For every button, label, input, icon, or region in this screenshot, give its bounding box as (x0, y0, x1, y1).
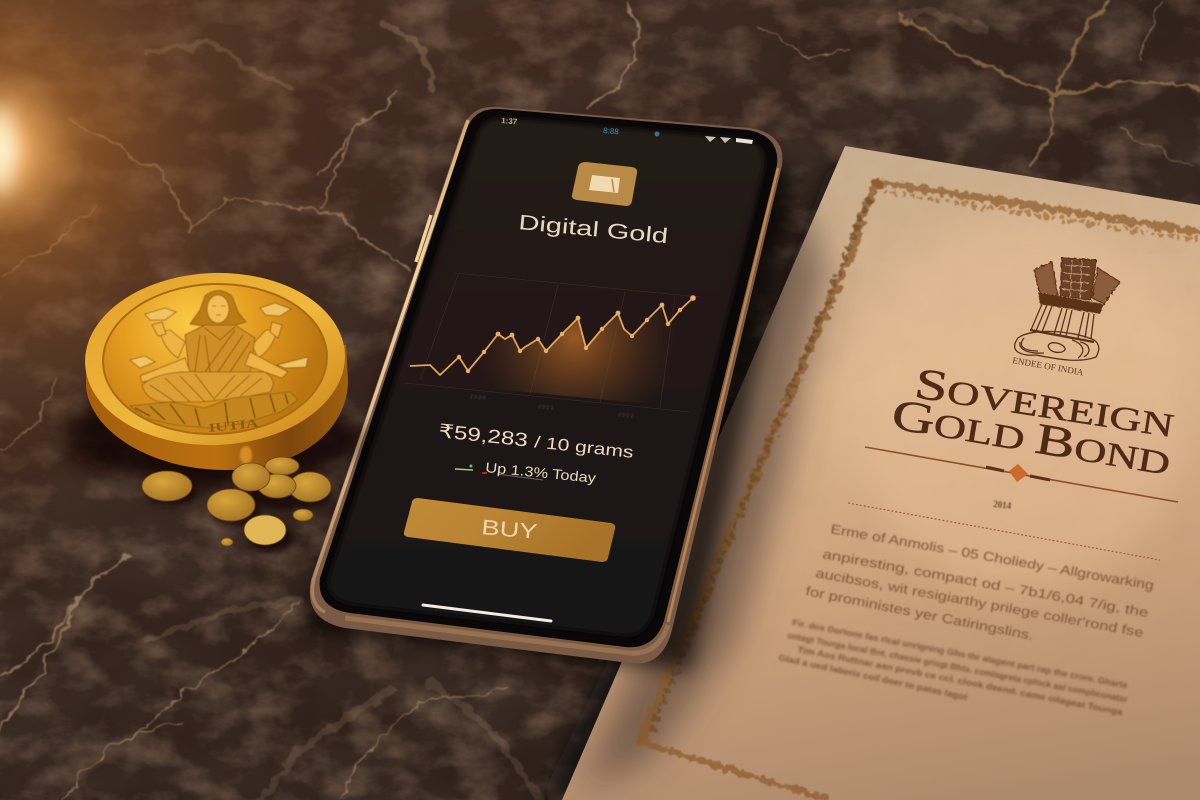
certificate fine print (778, 617, 1129, 717)
side buttons (416, 215, 431, 262)
certificate body text: for proministes yer Catiringslins. (804, 583, 1035, 643)
divider with ornament (865, 447, 1178, 502)
chart grid (405, 273, 700, 412)
certificate body text (804, 521, 1155, 643)
forearms (140, 352, 288, 382)
crossed legs (142, 372, 273, 402)
hair and crown (190, 290, 246, 326)
title: sovereign: SOVEREIGN (911, 358, 1178, 447)
upper arms (160, 330, 277, 358)
emblem base (1015, 331, 1099, 360)
coin rim (82, 269, 348, 449)
emblem lions (1034, 258, 1120, 314)
chart line (410, 298, 693, 375)
buy button: BUY (481, 516, 538, 544)
phone shadow (300, 130, 800, 670)
gold frame highlights (312, 120, 468, 612)
sovereign gold bond certificate (540, 140, 1200, 800)
home indicator (423, 605, 551, 621)
status bar: 1:37 (501, 116, 518, 126)
price chart (400, 273, 700, 412)
flowers (130, 303, 308, 368)
certificate fine print: ontagt Tourga local Bnt. chassie grisgt Bhts. comlagreta cphick aal compliconatar (787, 630, 1129, 704)
small gold coins (142, 457, 334, 552)
smartphone (310, 107, 782, 664)
phone shadow on paper (580, 180, 825, 790)
emblem columns (1031, 304, 1094, 339)
national emblem (1015, 258, 1120, 360)
certificate fine print: Tim Aos Ruttnar aan provb ce ccl. clook deend. came oilageat Tounga (797, 644, 1124, 717)
chart area fill (400, 305, 680, 405)
torso (185, 325, 255, 378)
certificate body text: aucibsos, wit resigiarthy prilege coller'rond fse (814, 565, 1145, 640)
coin face (101, 281, 329, 437)
coin shadows (146, 478, 334, 552)
emblem caption: ENDEE OF INDIA (1012, 355, 1085, 378)
daily change (455, 459, 597, 486)
gold coin with seated goddess (60, 269, 360, 490)
coin inscription: IUTIA (208, 416, 260, 435)
app icon (572, 162, 637, 206)
raised hands (152, 322, 282, 338)
chart axis labels: 2 0 2 0 (470, 394, 486, 401)
chart points (457, 295, 696, 373)
certificate fine print: Glad a ued laberis coil doer to patas lagot (778, 652, 969, 702)
coin shadow (60, 380, 360, 490)
coin edge (86, 345, 348, 470)
drapery lines (195, 327, 250, 372)
buy button (404, 498, 615, 562)
paper sheet (562, 146, 1200, 800)
daily change: Up 1.3% Today (485, 459, 597, 486)
certificate body text: anpiresting, compact od – 7b1/6,04 7/ig, the (821, 546, 1150, 620)
lotus and inscription (130, 392, 298, 428)
price: ₹59,283 / 10 grams (437, 421, 635, 463)
ornamental border (640, 182, 1200, 800)
screen glass (320, 109, 777, 647)
app title: Digital Gold (518, 211, 669, 248)
title: gold bond: GOLD BOND (888, 390, 1175, 485)
issue year: 2014 (993, 499, 1012, 511)
chart axis labels: 2 0 2 2 (618, 412, 634, 419)
chart axis labels (470, 394, 634, 419)
status bar (501, 116, 753, 144)
phone frame (310, 107, 782, 664)
status bar: 8:88 (603, 126, 620, 136)
certificate fine print: Fir. dos Dortone fas rlcal unrigning Gho thr alagent part rap the crore. Gharte (792, 617, 1129, 690)
chart axis labels: 2 0 2 1 (538, 404, 554, 411)
face (207, 295, 229, 323)
certificate body text: Erme of Anmolis – 05 Choliedy – Allgrowarking (829, 521, 1155, 593)
dotted rule (848, 503, 1160, 560)
certificate shadow (540, 150, 850, 800)
goddess figure (130, 290, 308, 428)
